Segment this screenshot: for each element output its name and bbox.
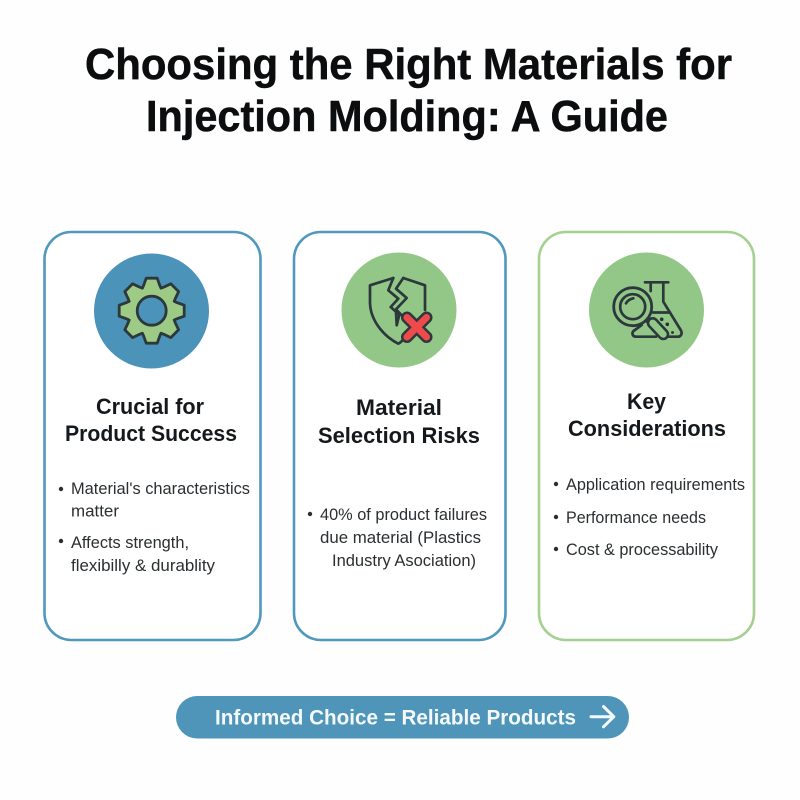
callout: informed choice pill: Informed Choice = Reliable Products (215, 706, 576, 730)
callout: informed choice pill (176, 696, 629, 738)
bullet list: failure statistic: 40% of product failures (320, 506, 487, 524)
bullet list: material characteristics (59, 480, 250, 575)
bullet list: failure statistic: due material (Plastics (320, 529, 481, 547)
bullet list: material characteristics: matter (71, 502, 120, 520)
icon: arrow (591, 706, 614, 727)
bullet list: considerations: Cost & processability (566, 541, 719, 559)
heading: key considerations (568, 389, 726, 441)
heading: key considerations: Considerations (568, 416, 726, 441)
panel: crucial for product success (44, 232, 260, 640)
icon: broken shield with red x (342, 252, 456, 368)
title: Injection Molding: A Guide (146, 92, 668, 141)
bullet list: considerations: Performance needs (566, 509, 706, 527)
panel: material selection risks (294, 232, 506, 640)
heading: material selection risks: Selection Risks (318, 423, 480, 448)
icon: gear on blue circle (94, 254, 209, 368)
bullet list: material characteristics: Affects strength, (71, 534, 189, 552)
title (85, 40, 732, 141)
bullet list: failure statistic (308, 506, 487, 570)
panel: key considerations (539, 232, 754, 640)
bullet list: considerations (554, 476, 745, 559)
heading: key considerations: Key (627, 389, 667, 414)
heading: crucial for product success: Product Success (65, 421, 237, 446)
bullet list: considerations: Application requirements (566, 476, 745, 494)
heading: material selection risks: Material (356, 395, 442, 420)
title: Choosing the Right Materials for (85, 40, 732, 89)
heading: crucial for product success: Crucial for (96, 394, 204, 419)
bullet list: material characteristics: Material's characteristics (71, 480, 250, 498)
icon: magnifier and flask (589, 252, 704, 368)
bullet list: failure statistic: Industry Asociation) (332, 552, 476, 570)
heading: crucial for product success (65, 394, 237, 446)
heading: material selection risks (318, 395, 480, 448)
bullet list: material characteristics: flexibilly & durablity (71, 557, 216, 575)
